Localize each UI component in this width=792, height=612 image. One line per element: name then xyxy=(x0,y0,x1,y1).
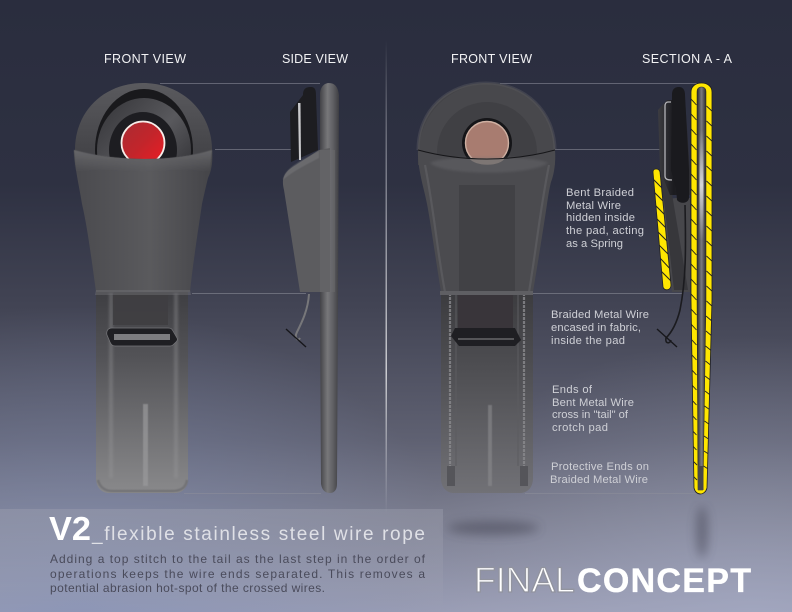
wire and loop xyxy=(296,294,309,340)
callout: braided metal wire: Braided Metal Wire xyxy=(551,309,649,321)
callout: protective ends xyxy=(550,461,649,486)
heading: section a-a: SECTION A - A xyxy=(642,52,733,66)
callout: protective ends: Protective Ends on xyxy=(551,461,649,473)
final concept title xyxy=(474,561,751,600)
belt slot xyxy=(107,328,177,346)
back strip xyxy=(320,83,339,493)
belt slot xyxy=(451,328,521,346)
callout: bent braided wire: hidden inside xyxy=(566,212,635,224)
panel heading: _flexible stainless steel wire rope xyxy=(91,524,425,545)
panel body text: Adding a top stitch to the tail as the last step in the order of xyxy=(50,552,426,566)
cover pad xyxy=(74,150,212,292)
final concept title: FINAL xyxy=(474,561,575,600)
see-through button xyxy=(462,118,512,168)
grey pad section xyxy=(660,198,690,292)
tail xyxy=(96,285,188,493)
protective ends xyxy=(447,466,528,486)
center divider xyxy=(386,40,387,515)
yellow section strip xyxy=(691,83,712,494)
shadows xyxy=(447,506,708,558)
panel body text: potential abrasion hot-spot of the crossed wires. xyxy=(50,581,325,595)
cover pad xyxy=(418,150,555,292)
side view left xyxy=(283,83,339,493)
callout: ends of wire: cross in "tail" of xyxy=(552,409,629,421)
section a-a illustration xyxy=(650,80,715,496)
front view right: transparent pad xyxy=(418,83,555,493)
callout: bent braided wire xyxy=(566,187,644,250)
description panel xyxy=(0,509,443,612)
callout: braided metal wire xyxy=(551,309,649,347)
panel heading xyxy=(49,510,425,547)
callout: braided metal wire: encased in fabric, xyxy=(551,322,641,334)
wires in tail xyxy=(450,293,524,466)
clip xyxy=(290,87,318,162)
leader lines xyxy=(160,84,702,494)
callout: bent braided wire: Metal Wire xyxy=(566,200,621,212)
callout: braided metal wire: inside the pad xyxy=(551,335,625,347)
button rings xyxy=(95,89,193,159)
side pad xyxy=(283,148,330,292)
callout: ends of wire: Ends of xyxy=(552,384,593,396)
callout: ends of wire xyxy=(552,384,634,434)
panel body text xyxy=(50,552,426,595)
callout: bent braided wire: as a Spring xyxy=(566,238,623,250)
callout: bent braided wire: the pad, acting xyxy=(566,225,644,237)
callout: bent braided wire: Bent Braided xyxy=(566,187,634,199)
front view left: pad illustration xyxy=(74,83,212,493)
heading: front view left: FRONT VIEW xyxy=(104,52,186,66)
wire and loop xyxy=(666,205,685,343)
clip xyxy=(658,100,690,195)
dome xyxy=(418,83,555,165)
callout: ends of wire: Bent Metal Wire xyxy=(552,397,634,409)
callout: protective ends: Braided Metal Wire xyxy=(550,474,648,486)
heading: side view: SIDE VIEW xyxy=(282,52,348,66)
heading: front view right: FRONT VIEW xyxy=(451,52,532,66)
panel heading: V2 xyxy=(49,510,91,547)
callout: ends of wire: crotch pad xyxy=(552,422,608,434)
final concept title: CONCEPT xyxy=(577,562,751,600)
bent spring wire xyxy=(652,168,672,290)
panel body text: operations keeps the wire ends separated. This removes a xyxy=(50,567,425,581)
red button xyxy=(122,122,164,164)
dome xyxy=(75,83,212,165)
